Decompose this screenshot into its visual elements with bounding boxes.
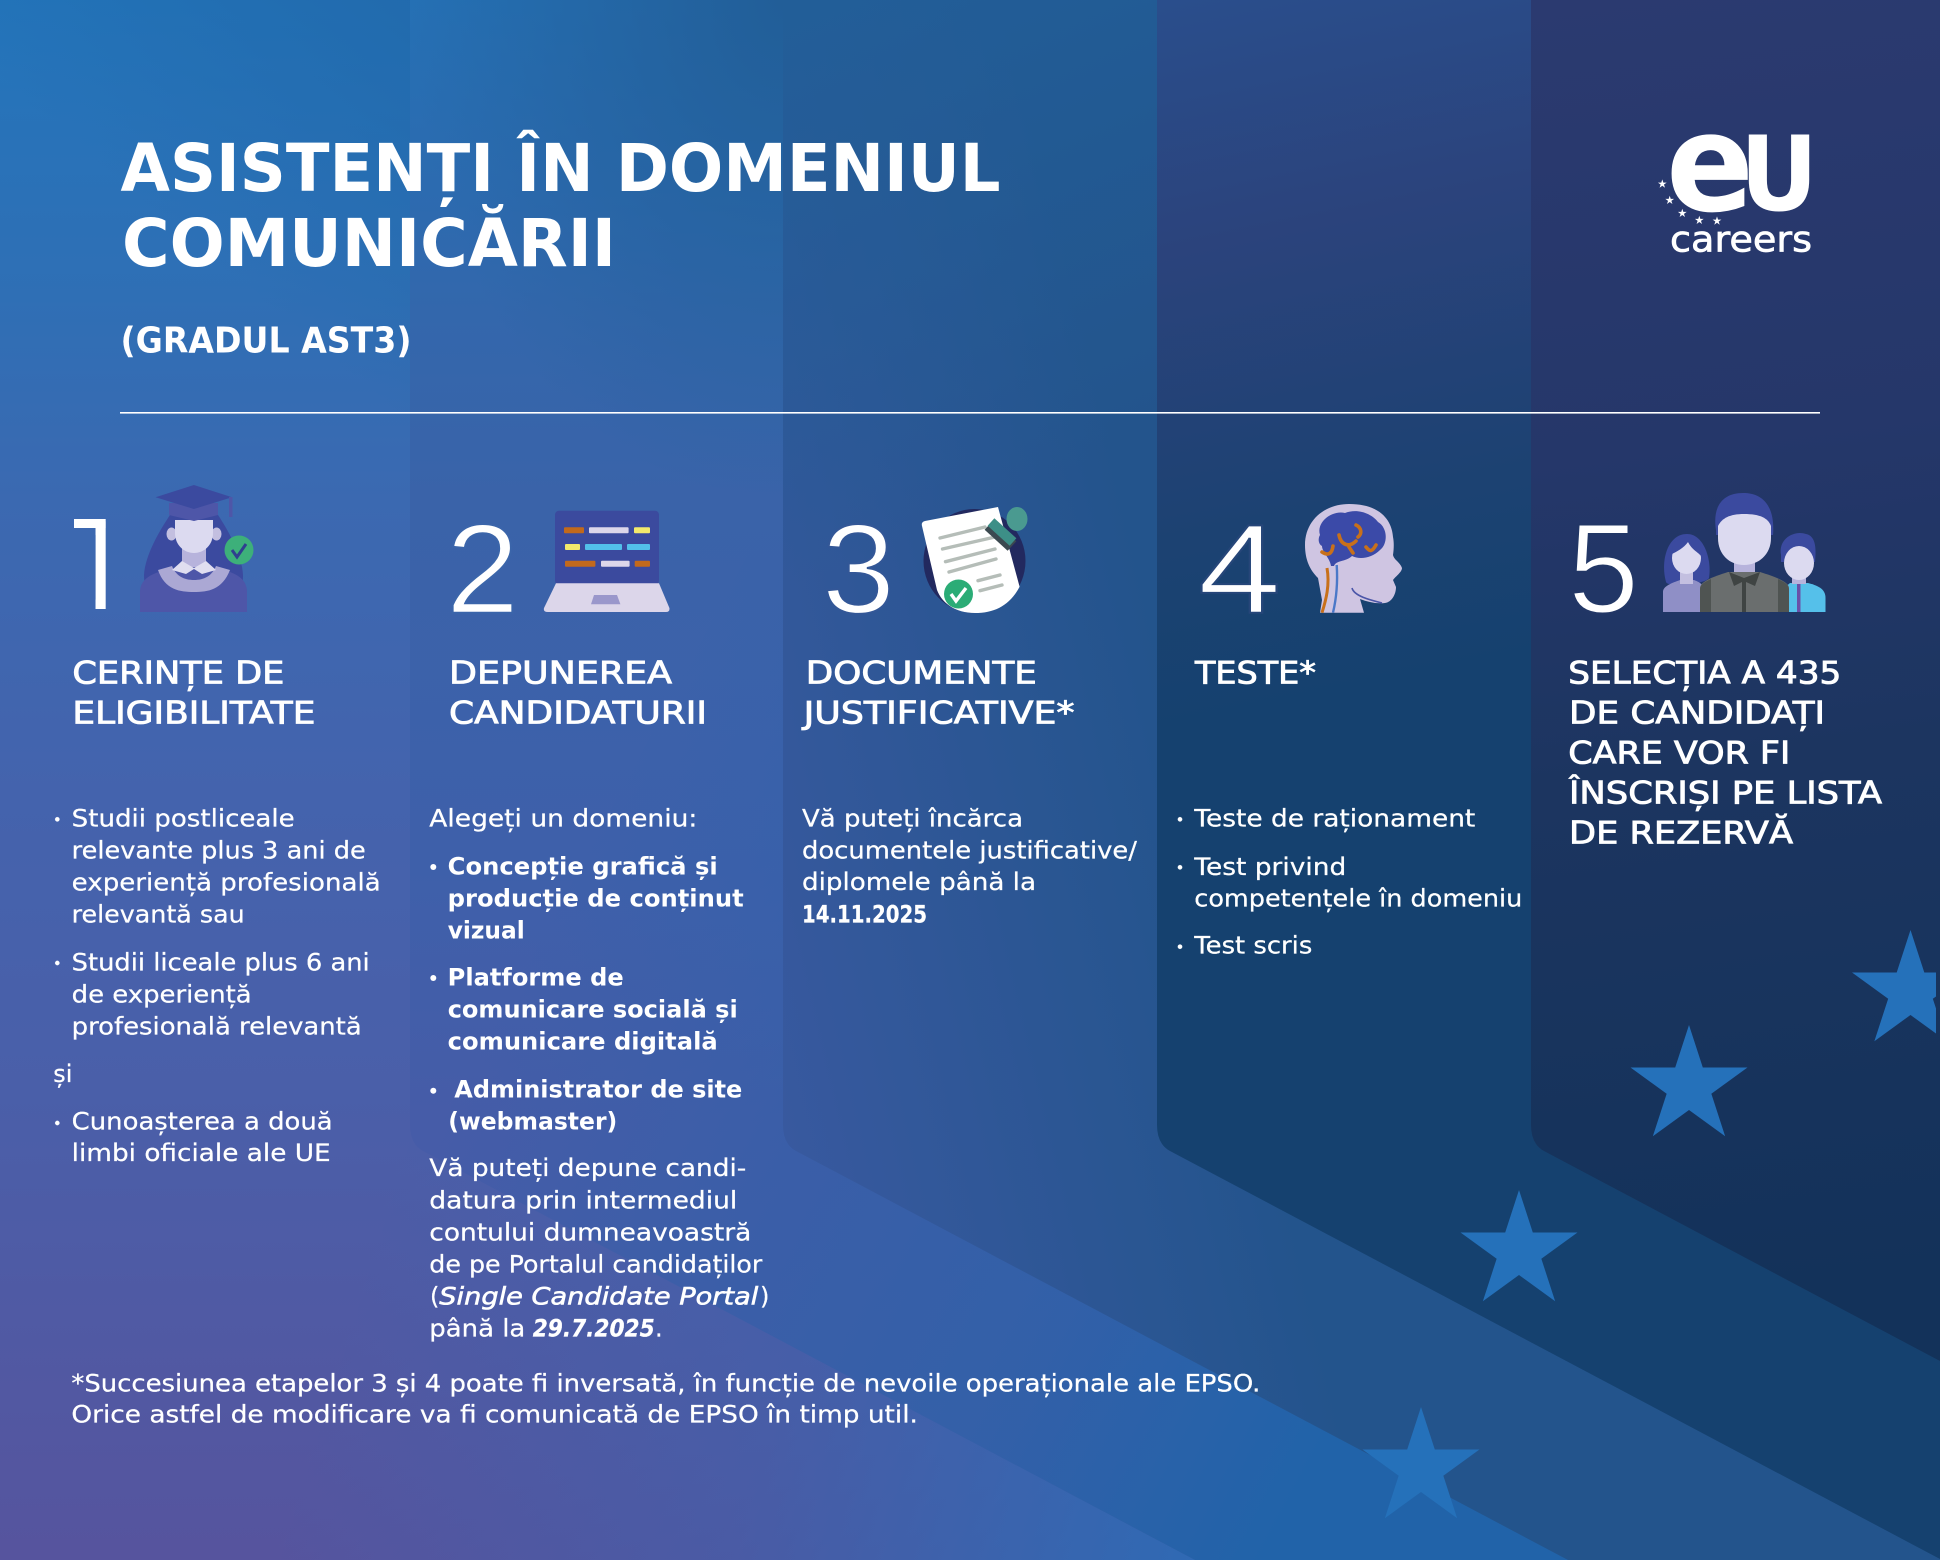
- decorative EU stars: [1363, 930, 1940, 1518]
- requirements list: experiență profesională: [72, 868, 381, 896]
- documents text block: Vă puteți încărca: [802, 805, 1023, 833]
- logo: EU careers: U: [1740, 115, 1818, 235]
- heading: [1568, 655, 1882, 851]
- icon: laptop: [544, 511, 669, 612]
- domain list: Platforme de: [448, 964, 624, 992]
- heading: TESTE*: [1194, 655, 1316, 691]
- documents text block: documentele justificative/: [802, 836, 1138, 864]
- step number 3: 3: [822, 498, 895, 640]
- logo: EU careers: careers: [1670, 220, 1812, 261]
- domain list: [429, 805, 744, 1135]
- panel: step 2 background: [410, 0, 1940, 1560]
- step 2: application: [429, 498, 769, 1343]
- tests list: [1178, 805, 1522, 959]
- documents text block: diplomele până la: [802, 868, 1036, 896]
- application text block: [429, 1154, 769, 1343]
- application text block: contului dumneavoastră: [429, 1219, 751, 1247]
- tests list: Test privind: [1193, 853, 1346, 881]
- icon: head with brain: [1305, 504, 1402, 613]
- requirements list: profesională relevantă: [72, 1012, 362, 1040]
- logo: EU careers: [1658, 86, 1818, 261]
- heading: CERINȚE DE: [72, 655, 284, 691]
- step number 4: 4: [1198, 498, 1281, 640]
- footnote: Orice astfel de modificare va fi comunicată de EPSO în timp util.: [71, 1401, 918, 1429]
- title: ASISTENȚI ÎN DOMENIUL: [120, 129, 1000, 207]
- application text block: Vă puteți depune candi-: [429, 1154, 746, 1182]
- step 1: eligibility: [53, 485, 381, 1167]
- domain list: comunicare digitală: [448, 1027, 718, 1055]
- panel: step 5 background: [1531, 0, 1940, 1361]
- heading: [72, 655, 315, 731]
- domain list: vizual: [448, 916, 525, 944]
- application text block: ): [760, 1282, 769, 1310]
- heading: DE CANDIDAȚI: [1569, 695, 1825, 731]
- application text block: Single Candidate Portal: [439, 1282, 759, 1310]
- application text block: de pe Portalul candidaților: [429, 1251, 762, 1279]
- heading: DEPUNEREA: [449, 655, 672, 691]
- step number 5: 5: [1568, 498, 1639, 640]
- heading: [801, 655, 1075, 731]
- panel: step 3 background: [783, 0, 1940, 1560]
- documents text block: 14.11.2025: [802, 900, 927, 928]
- step 4: tests: [1178, 498, 1522, 959]
- title: COMUNICĂRII: [122, 204, 616, 282]
- icon: document with stamp: [922, 507, 1028, 613]
- documents text block: [802, 805, 1138, 928]
- heading: DE REZERVĂ: [1569, 814, 1793, 851]
- domain list: Administrator de site: [454, 1076, 742, 1104]
- step number 1: 1: [72, 494, 132, 636]
- title: [120, 129, 1000, 282]
- heading: JUSTIFICATIVE*: [801, 695, 1075, 731]
- tests list: competențele în domeniu: [1194, 885, 1522, 913]
- domain list: (webmaster): [448, 1107, 617, 1135]
- logo: EU careers: e: [1666, 86, 1754, 244]
- requirements list: de experiență: [72, 980, 252, 1008]
- panel: step 4 background: [1157, 0, 1940, 1559]
- subtitle: grade: (GRADUL AST3): [120, 321, 412, 362]
- requirements list: și: [53, 1060, 72, 1088]
- tests list: Test scris: [1193, 931, 1312, 959]
- application text block: 29.7.2025: [533, 1315, 655, 1343]
- footnote: [71, 1370, 1260, 1429]
- heading: SELECȚIA A 435: [1568, 655, 1841, 691]
- requirements list: Cunoașterea a două: [72, 1107, 333, 1135]
- tests list: Teste de raționament: [1193, 805, 1475, 833]
- requirements list: limbi oficiale ale UE: [72, 1139, 331, 1167]
- icon: three candidates: [1663, 493, 1826, 612]
- heading: DOCUMENTE: [806, 655, 1037, 691]
- domain list: Concepție grafică și: [448, 852, 718, 880]
- heading: ELIGIBILITATE: [72, 695, 315, 731]
- heading: CARE VOR FI: [1568, 735, 1790, 771]
- footnote: *Succesiunea etapelor 3 și 4 poate fi inversată, în funcție de nevoile operaționale ale EPSO.: [71, 1370, 1260, 1398]
- domain list: producție de conținut: [448, 885, 744, 913]
- requirements list: relevante plus 3 ani de: [72, 836, 366, 864]
- domain list: comunicare socială și: [448, 995, 738, 1023]
- application text block: până la: [429, 1315, 525, 1343]
- application text block: (: [430, 1282, 439, 1310]
- requirements list: Studii postliceale: [72, 805, 295, 833]
- step number 2: 2: [446, 498, 519, 640]
- requirements list: relevantă sau: [72, 900, 245, 928]
- domain list: Alegeți un domeniu:: [429, 805, 697, 833]
- heading: [449, 655, 707, 731]
- requirements list: [53, 805, 381, 1167]
- step number 1: [74, 519, 106, 609]
- requirements list: Studii liceale plus 6 ani: [72, 948, 370, 976]
- application text block: datura prin intermediul: [429, 1186, 737, 1214]
- application text block: .: [655, 1315, 663, 1343]
- icon: graduate: [140, 485, 254, 612]
- heading: CANDIDATURII: [449, 695, 707, 731]
- step 3: supporting documents: [801, 498, 1138, 928]
- step 5: reserve list: [1568, 493, 1882, 851]
- heading: ÎNSCRIȘI PE LISTA: [1568, 775, 1882, 811]
